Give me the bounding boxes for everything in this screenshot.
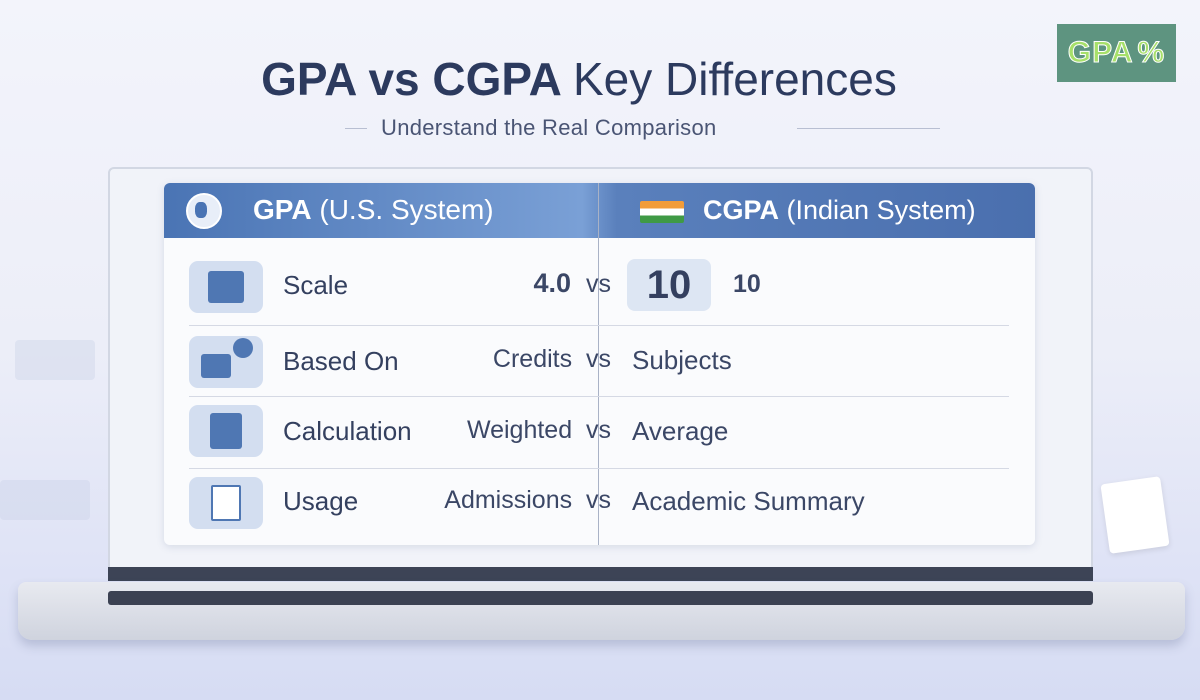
row: usage: Admissions vs [444,486,611,514]
row: scale: Scale [283,270,348,300]
icon: id card [189,336,263,388]
row: calculation: Calculation [283,416,412,446]
icon: calculator [189,405,263,457]
header left: GPA: GPA (U.S. System) [253,194,494,225]
logo [1057,24,1176,82]
row: calculation: Weighted vs [467,416,611,444]
logo: % [1138,36,1165,69]
big 10 box: 10 [647,263,691,307]
header [164,183,1035,238]
laptop [14,167,1189,650]
background decor right: paper [1100,476,1170,554]
bezel bottom [108,567,1093,581]
row: based on: Subjects [632,345,732,375]
row: usage: Academic Summary [632,486,865,516]
header right: CGPA: CGPA (Indian System) [703,195,976,225]
row: usage: Usage [283,486,358,516]
big 10 box [627,259,711,311]
row: based on: Based On [283,346,399,376]
row: scale: 10 [733,270,761,298]
background decor left [0,340,95,520]
row: calculation: Average [632,416,728,446]
row: scale [189,259,761,313]
icon: globe [186,193,222,229]
row: based on [189,336,732,388]
subtitle: Understand the Real Comparison [381,115,717,140]
header left: GPA [186,193,494,229]
screen [108,167,1093,580]
row: scale: 4.0 vs [533,268,611,298]
icon: India flag [640,201,684,223]
base [18,582,1185,640]
title: GPA vs CGPA Key Differences [261,53,897,105]
icon: document [189,477,263,529]
keyboard [108,591,1093,605]
icon: calculator [189,261,263,313]
logo: GPA [1068,36,1134,69]
row: based on: Credits vs [493,345,611,373]
divider [598,183,599,545]
comparison panel [164,183,1035,545]
row: usage [189,477,865,529]
row: calculation [189,405,728,457]
